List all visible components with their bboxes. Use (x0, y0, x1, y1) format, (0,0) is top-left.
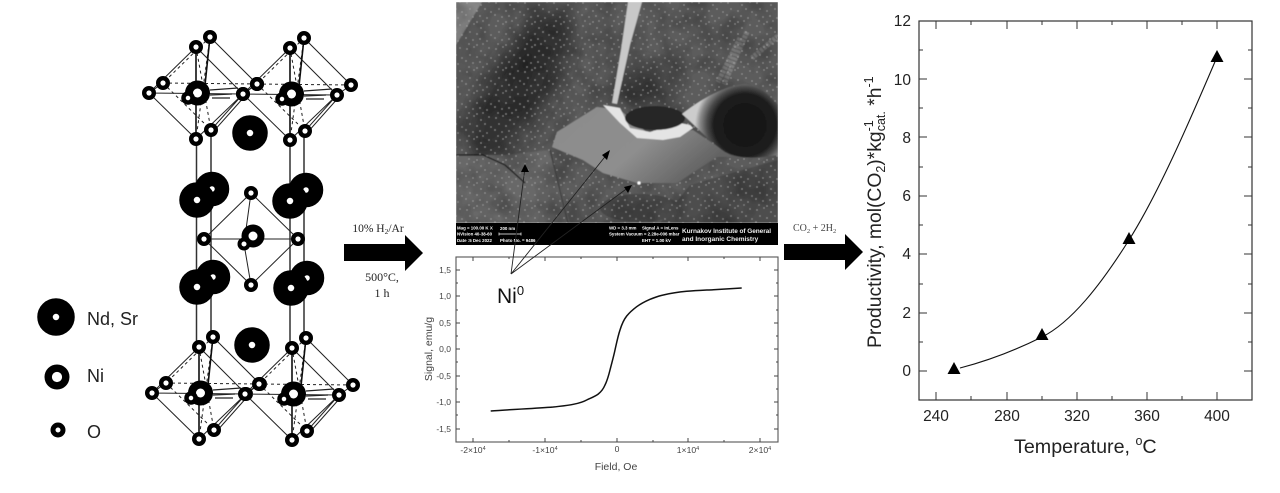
legend label: Nd, Sr: Nd, Sr (87, 309, 138, 329)
arrow: reduction step (344, 235, 423, 271)
y tick labels: 4 (902, 246, 911, 263)
dark pit (625, 106, 685, 130)
legend icon: Ni (48, 368, 66, 386)
x tick labels: 240 (923, 408, 949, 425)
x tick labels: 4 (555, 446, 558, 452)
Ni0 label: Ni (497, 285, 517, 308)
productivity curve (960, 57, 1217, 368)
bright ridge (603, 105, 693, 140)
bottom right NiO6 octahedron (240, 333, 358, 445)
x axis title: Temperature, (1014, 436, 1130, 458)
SEM info bar metadata: EHT = 1.00 kV (642, 238, 671, 243)
legend label: Ni: Ni (87, 366, 104, 386)
SEM info bar metadata: Date :5 Dec 2022 (457, 238, 492, 243)
SEM institute label: and Inorganic Chemistry (682, 236, 759, 243)
top right NiO6 octahedron (238, 33, 356, 145)
y tick labels: 1,0 (439, 291, 451, 301)
Ni0 label: 0 (517, 283, 524, 298)
legend (45, 306, 138, 442)
SEM info bar metadata: System Vacuum = 2.28e-006 mbar (609, 232, 680, 236)
y tick labels: 6 (902, 188, 911, 205)
top left NiO6 octahedron (144, 32, 262, 144)
x tick labels: 4 (696, 446, 699, 452)
y tick labels: 0 (902, 363, 911, 380)
x axis title: o (1135, 434, 1142, 448)
y axis title: )*kg (865, 131, 886, 166)
y tick labels: 0,0 (439, 344, 451, 354)
y tick labels: -1,5 (436, 424, 451, 434)
productivity chart (862, 13, 1252, 458)
chart frame (919, 21, 1252, 400)
y axis title: Productivity, mol(CO (865, 173, 886, 348)
x axis title: C (1142, 436, 1157, 458)
y axis title: -1 (862, 120, 876, 131)
arrow: reaction step (784, 234, 863, 270)
streak (612, 2, 642, 104)
y axis title: -1 (862, 76, 876, 88)
crystal structure diagram (144, 32, 358, 445)
reaction gas label: 2 (807, 228, 810, 235)
bottom left NiO6 octahedron (147, 332, 265, 444)
reduction conditions label: gas: 10% H (352, 223, 385, 235)
x tick labels: 0 (615, 444, 620, 454)
x axis title: Field, Oe (595, 461, 637, 473)
SEM info bar metadata: 200 nm (500, 226, 515, 231)
x tick labels: 400 (1204, 408, 1230, 425)
dark grain region (461, 6, 578, 156)
legend label: O: O (87, 422, 101, 442)
Nd, Sr atoms (186, 122, 317, 356)
arrowhead: particle 1 (521, 164, 529, 172)
SEM info bar metadata (457, 226, 680, 243)
SEM info bar metadata: Photo No. = 9486 (500, 238, 536, 243)
data markers (948, 50, 1224, 374)
chart frame (456, 257, 778, 442)
pointer lines to Ni particles (511, 150, 632, 274)
y tick labels (894, 13, 911, 380)
crater (682, 84, 778, 158)
y tick labels: 2 (902, 305, 911, 322)
x tick labels: -2×10 (460, 445, 483, 455)
x tick labels: 360 (1134, 408, 1160, 425)
SEM info bar metadata: WD = 3.3 mm (609, 226, 637, 230)
x tick labels: 1×10 (677, 445, 696, 455)
y tick labels: 10 (894, 72, 911, 89)
x tick labels (460, 444, 771, 455)
x tick labels: 280 (994, 408, 1020, 425)
arrowhead: particle 3 (624, 185, 632, 193)
legend icon: Nd, Sr (45, 306, 67, 328)
x tick labels: -1×10 (532, 445, 555, 455)
ladder stripes (718, 32, 778, 84)
y axis title: cat. (874, 111, 888, 131)
reduction conditions label: temperature and time: 500°C, (365, 270, 399, 284)
legend icon: O (53, 425, 63, 435)
SEM info bar metadata: Mag = 100.00 K X (457, 226, 493, 230)
SEM micrograph (450, 0, 778, 245)
reduction conditions label: gas: 2 (385, 227, 389, 236)
SEM info bar metadata: NVision 40-38-60 (457, 232, 493, 236)
y tick labels: 8 (902, 130, 911, 147)
y axis title: 2 (874, 166, 888, 173)
y axis title: *h (865, 88, 886, 111)
SEM info bar metadata: Signal A = InLens (642, 226, 679, 230)
y tick labels (436, 265, 451, 434)
reduction conditions label: temperature and time: 1 h (374, 286, 390, 300)
y tick labels: 0,5 (439, 318, 451, 328)
x tick labels: 2×10 (749, 445, 768, 455)
y tick labels: 12 (894, 13, 911, 30)
reaction gas label: CO (793, 223, 807, 234)
y axis title: Signal, emu/g (423, 317, 435, 381)
x tick labels: 4 (768, 446, 771, 452)
magnetization chart (423, 257, 778, 473)
crack (456, 155, 525, 183)
reaction gas label: + 2H (810, 223, 833, 234)
chart ticks (919, 21, 1252, 400)
y tick labels: -0,5 (436, 371, 451, 381)
reduction conditions label: gas: /Ar (388, 223, 404, 235)
x tick labels: 320 (1064, 408, 1090, 425)
x tick labels (923, 408, 1230, 425)
y tick labels: -1,0 (436, 397, 451, 407)
SEM info bar (456, 223, 778, 245)
chart ticks (456, 257, 778, 442)
reaction gas label: 2 (833, 228, 836, 235)
reduced plateau (552, 107, 733, 183)
central NiO6 octahedron (199, 188, 303, 290)
x tick labels: 4 (483, 446, 486, 452)
SEM institute label: Kurnakov Institute of General (682, 228, 771, 235)
vertical unit cell rods (196, 130, 304, 348)
arrowhead: particle 2 (602, 150, 610, 160)
magnetization curve (491, 288, 742, 411)
y tick labels: 1,5 (439, 265, 451, 275)
